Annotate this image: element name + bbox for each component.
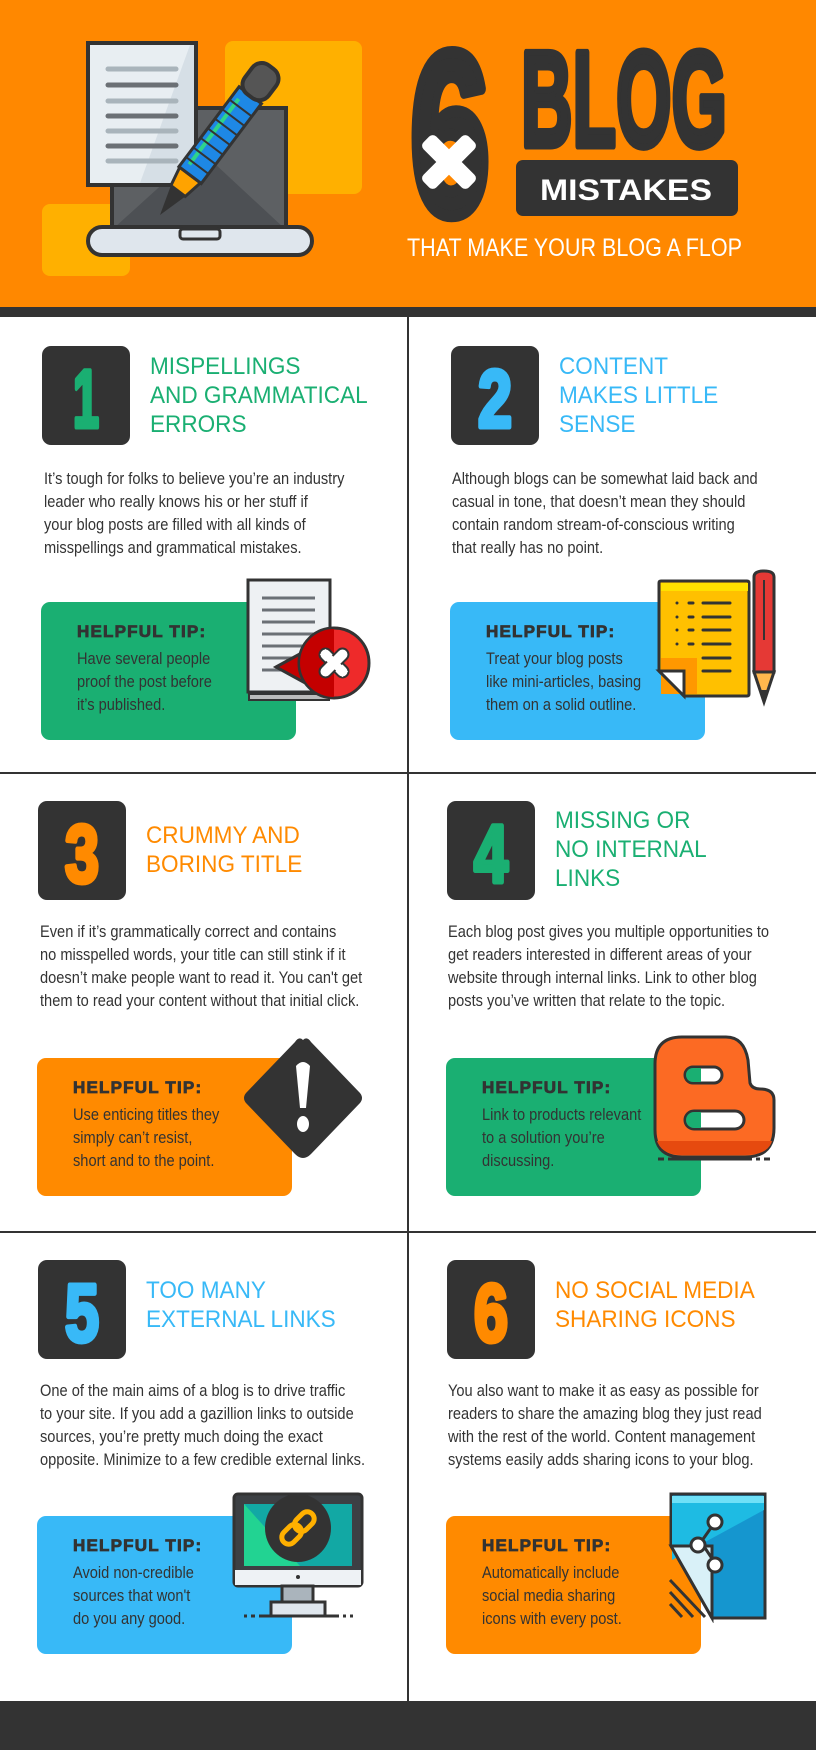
number 5 bbox=[38, 1260, 126, 1359]
number 2 bbox=[451, 346, 539, 445]
tip box: like mini-articles, basing bbox=[486, 672, 641, 691]
tip box: HELPFUL TIP: bbox=[73, 1536, 202, 1555]
footer bbox=[0, 1701, 816, 1750]
panel: mistake 3 bbox=[37, 801, 362, 1196]
title: 6 BLOG MISTAKES: 6 bbox=[410, 5, 490, 264]
tip box: it’s published. bbox=[77, 695, 165, 714]
icon: monitor with link bbox=[232, 1492, 364, 1618]
heading: TOO MANY bbox=[146, 1277, 266, 1304]
body text: posts you’ve written that relate to the topic. bbox=[448, 991, 725, 1010]
body text bbox=[44, 469, 344, 557]
title: 6 BLOG MISTAKES bbox=[404, 5, 742, 264]
tip box: HELPFUL TIP: bbox=[77, 622, 206, 641]
heading: BORING TITLE bbox=[146, 851, 302, 878]
tip box: to a solution you’re bbox=[482, 1128, 605, 1147]
tip box: Link to products relevant bbox=[482, 1105, 641, 1124]
tip box: Treat your blog posts bbox=[486, 649, 623, 668]
body text: It’s tough for folks to believe you’re an industry bbox=[44, 469, 344, 488]
title: 6 BLOG MISTAKES: MISTAKES bbox=[540, 174, 712, 207]
body text: Even if it’s grammatically correct and contains bbox=[40, 922, 336, 941]
heading: NO SOCIAL MEDIA bbox=[555, 1277, 755, 1304]
number 6 bbox=[447, 1260, 535, 1359]
panel: mistake 4 bbox=[446, 801, 776, 1196]
body text: get readers interested in different areas of your bbox=[448, 945, 752, 964]
heading bbox=[150, 353, 368, 438]
heading: EXTERNAL LINKS bbox=[146, 1306, 336, 1333]
body text bbox=[448, 1381, 762, 1469]
body text: You also want to make it as easy as possible for bbox=[448, 1381, 759, 1400]
body text: systems easily adds sharing icons to your blog. bbox=[448, 1450, 754, 1469]
panel: mistake 6 bbox=[446, 1260, 766, 1654]
heading bbox=[555, 1277, 755, 1333]
body text: contain random stream-of-conscious writing bbox=[452, 515, 735, 534]
icon: document with error bbox=[246, 578, 370, 701]
heading: MAKES LITTLE bbox=[559, 382, 718, 409]
tip box: Have several people bbox=[77, 649, 210, 668]
heading: LINKS bbox=[555, 865, 620, 892]
icon: share document bbox=[668, 1492, 766, 1623]
tip box: Avoid non-credible bbox=[73, 1563, 194, 1582]
tip box: icons with every post. bbox=[482, 1609, 622, 1628]
tip box: HELPFUL TIP: bbox=[482, 1078, 611, 1097]
heading bbox=[146, 1277, 336, 1333]
panel: mistake 2 bbox=[450, 346, 776, 740]
body text: Although blogs can be somewhat laid back and bbox=[452, 469, 758, 488]
body text: that really has no point. bbox=[452, 538, 603, 557]
body text bbox=[40, 922, 362, 1010]
body text: your blog posts are filled with all kinds of bbox=[44, 515, 306, 534]
number 6: 6 bbox=[474, 1268, 508, 1359]
heading: MISPELLINGS bbox=[150, 353, 300, 380]
body text: opposite. Minimize to a few credible external links. bbox=[40, 1450, 365, 1469]
panel: mistake 5 bbox=[37, 1260, 365, 1654]
tip box bbox=[37, 1516, 292, 1654]
body text: website through internal links. Link to other blog bbox=[448, 968, 757, 987]
number 1 bbox=[42, 346, 130, 445]
heading bbox=[559, 353, 718, 438]
heading: CRUMMY AND bbox=[146, 822, 300, 849]
body text: Each blog post gives you multiple opportunities to bbox=[448, 922, 769, 941]
body text: sources, you’re pretty much doing the exact bbox=[40, 1427, 323, 1446]
tip box bbox=[450, 602, 705, 740]
tip box: social media sharing bbox=[482, 1586, 615, 1605]
panel: mistake 1 bbox=[41, 346, 370, 740]
body text: doesn’t make people want to read it. You can't get bbox=[40, 968, 362, 987]
body text bbox=[452, 469, 758, 557]
title: 6 BLOG MISTAKES: THAT MAKE YOUR BLOG A FLOP bbox=[407, 234, 742, 262]
tip box: short and to the point. bbox=[73, 1151, 214, 1170]
tip box bbox=[446, 1058, 701, 1196]
heading: NO INTERNAL bbox=[555, 836, 707, 863]
icon: warning diamond bbox=[244, 1038, 362, 1158]
number 1: 1 bbox=[73, 354, 99, 445]
illustration: laptop with document and pencil bbox=[42, 41, 362, 276]
tip box bbox=[446, 1516, 701, 1654]
heading bbox=[146, 822, 302, 878]
body text: to your site. If you add a gazillion links to outside bbox=[40, 1404, 354, 1423]
heading: SHARING ICONS bbox=[555, 1306, 736, 1333]
tip box: do you any good. bbox=[73, 1609, 185, 1628]
body text: them to read your content without that initial click. bbox=[40, 991, 359, 1010]
tip box: Automatically include bbox=[482, 1563, 619, 1582]
icon: blogger logo bbox=[654, 1036, 776, 1160]
heading: AND GRAMMATICAL bbox=[150, 382, 368, 409]
number 4: 4 bbox=[474, 809, 508, 900]
tip box bbox=[41, 602, 296, 740]
tip box: proof the post before bbox=[77, 672, 212, 691]
dividers bbox=[407, 317, 409, 1701]
tip box: sources that won't bbox=[73, 1586, 190, 1605]
header bbox=[0, 0, 816, 317]
tip box: Use enticing titles they bbox=[73, 1105, 219, 1124]
tip box: HELPFUL TIP: bbox=[73, 1078, 202, 1097]
heading: MISSING OR bbox=[555, 807, 690, 834]
tip box: HELPFUL TIP: bbox=[482, 1536, 611, 1555]
body text bbox=[448, 922, 769, 1010]
number 4 bbox=[447, 801, 535, 900]
tip box: HELPFUL TIP: bbox=[486, 622, 615, 641]
tip box: simply can’t resist, bbox=[73, 1128, 192, 1147]
body text bbox=[40, 1381, 365, 1469]
number 3: 3 bbox=[65, 809, 99, 900]
heading: SENSE bbox=[559, 411, 635, 438]
tip box bbox=[37, 1058, 292, 1196]
body text: leader who really knows his or her stuff if bbox=[44, 492, 308, 511]
tip box: discussing. bbox=[482, 1151, 554, 1170]
body text: One of the main aims of a blog is to drive traffic bbox=[40, 1381, 345, 1400]
body text: casual in tone, that doesn’t mean they should bbox=[452, 492, 745, 511]
heading: CONTENT bbox=[559, 353, 668, 380]
icon: notepad and pencil bbox=[656, 570, 776, 707]
body text: with the rest of the world. Content management bbox=[448, 1427, 755, 1446]
number 3 bbox=[38, 801, 126, 900]
number 2: 2 bbox=[478, 354, 512, 445]
body text: misspellings and grammatical mistakes. bbox=[44, 538, 302, 557]
number 5: 5 bbox=[65, 1268, 99, 1359]
body text: readers to share the amazing blog they just read bbox=[448, 1404, 762, 1423]
body text: no misspelled words, your title can still stink if it bbox=[40, 945, 346, 964]
heading bbox=[555, 807, 707, 892]
tip box: them on a solid outline. bbox=[486, 695, 636, 714]
heading: ERRORS bbox=[150, 411, 247, 438]
